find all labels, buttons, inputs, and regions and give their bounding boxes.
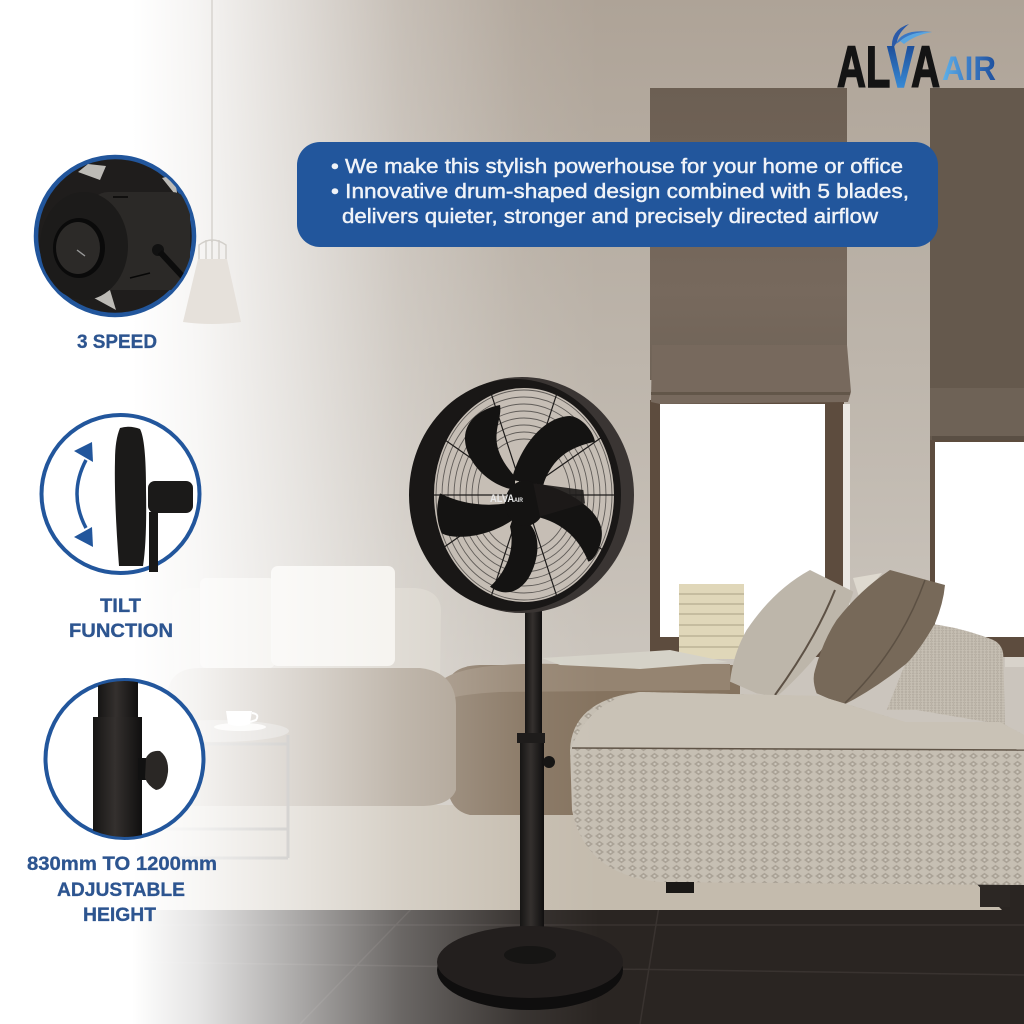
label: tilt function: TILT: [100, 596, 141, 617]
grille rings: [433, 390, 615, 600]
height knob: [543, 756, 555, 768]
logo: [837, 24, 996, 100]
callout: • We make this stylish powerhouse for your home or office: [331, 155, 903, 178]
fan head: [409, 377, 634, 613]
label: 3 speed: 3 SPEED: [77, 332, 157, 353]
pole lower: [520, 735, 544, 950]
patterned pillow: [730, 570, 853, 697]
callout: delivers quieter, stronger and precisely directed airflow: [342, 205, 878, 228]
fan hub logo: ALVAAIR: [490, 493, 524, 505]
label: adjustable height: ADJUSTABLE: [57, 880, 185, 901]
icon: tilt: [42, 415, 200, 573]
callout: [297, 142, 938, 247]
feet: [666, 882, 694, 893]
seat side: [570, 692, 1024, 885]
label: tilt function: FUNCTION: [69, 621, 173, 642]
pole upper: [525, 595, 542, 737]
feature: tilt function: [42, 415, 200, 642]
label: adjustable height: HEIGHT: [83, 905, 156, 926]
feature: adjustable height: [27, 679, 217, 926]
coffee table with cup: [130, 711, 289, 858]
logo swoosh: [892, 24, 932, 50]
chaise sofa: [570, 570, 1024, 907]
back arm: [887, 623, 1005, 725]
brown pillow: [814, 570, 945, 705]
cream pillow behind: [853, 573, 882, 600]
callout: • Innovative drum-shaped design combined with 5 blades,: [331, 180, 909, 203]
logo: AIR: [942, 50, 996, 88]
fan side view: [115, 427, 146, 566]
magazine: [542, 650, 728, 669]
sofa: left section: [168, 566, 456, 806]
icon: speed dial: [36, 157, 194, 315]
sofa: middle section: [445, 650, 740, 815]
label: tilt function: [69, 596, 173, 642]
window: right: [930, 88, 1024, 667]
seat top: [571, 692, 1024, 750]
window: left: [650, 88, 851, 657]
pendant lamp: [183, 0, 241, 324]
label: adjustable height: 830mm TO 1200mm: [27, 854, 217, 875]
tilt arrow: [74, 442, 93, 547]
books: [679, 584, 744, 659]
feature: 3 speed: [36, 157, 194, 353]
blades: [437, 405, 602, 592]
stand fan: [409, 377, 634, 1010]
left white fade: [0, 0, 600, 1024]
floor and rug: [0, 805, 1024, 1024]
logo: ALVA: [837, 35, 940, 100]
label: adjustable height: [27, 854, 217, 926]
icon: height knob: [46, 679, 204, 842]
round base: [437, 926, 623, 1010]
